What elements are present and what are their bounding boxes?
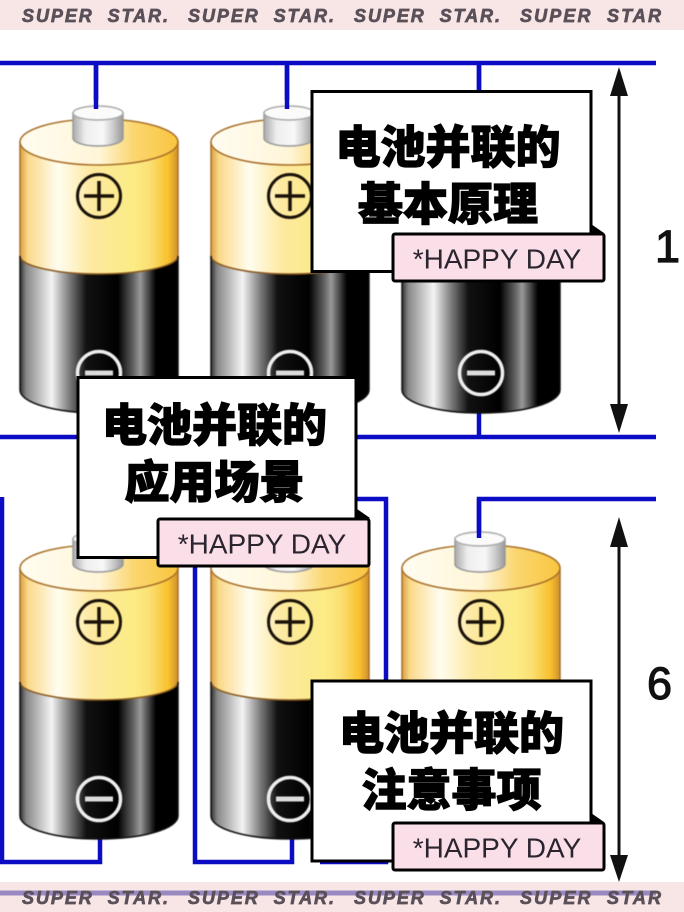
card (312, 92, 591, 272)
heading: 电池并联的 (335, 122, 561, 173)
battery bottom right (402, 532, 560, 839)
wire drops onto battery caps (96, 63, 479, 538)
top banner: SUPER STAR. (22, 6, 168, 26)
heading: 应用场景 (124, 457, 305, 508)
tag (158, 519, 369, 566)
heading: 电池并联的 (102, 400, 327, 451)
tag corner (591, 224, 604, 233)
card (78, 378, 356, 558)
bottom circuit wires (2, 497, 656, 862)
bottom banner: SUPER STAR. (354, 888, 500, 908)
heading: 注意事项 (361, 765, 542, 816)
bottom banner: SUPER STAR. (22, 888, 168, 908)
heading: 电池并联的 (339, 708, 564, 759)
tag text: *HAPPY DAY (178, 528, 347, 560)
dimension number 1: 1 (655, 221, 680, 272)
tag (393, 234, 604, 281)
panel: application scenarios (78, 378, 370, 566)
battery top left (20, 106, 178, 413)
bottom banner: SUPER STAR. (188, 888, 334, 908)
tag text: *HAPPY DAY (413, 244, 582, 274)
tag corner (357, 509, 370, 518)
battery top right (402, 106, 560, 413)
top banner (0, 0, 684, 30)
top banner: SUPER STAR. (354, 6, 500, 26)
tag (393, 823, 604, 870)
dimension number 6: 6 (647, 658, 672, 709)
tag text: *HAPPY DAY (413, 832, 582, 864)
tag corner (591, 813, 604, 822)
panel: basic principle (312, 92, 604, 281)
top banner: SUPER STAR (520, 6, 661, 26)
bottom banner: SUPER STAR (520, 888, 661, 908)
bottom banner (0, 882, 684, 912)
battery top middle (211, 106, 369, 413)
card (312, 681, 591, 861)
battery bottom middle (211, 532, 369, 839)
arrow: bottom dimension (610, 517, 628, 882)
battery bottom left (20, 532, 178, 839)
top banner: SUPER STAR. (188, 6, 334, 26)
arrow: top dimension (610, 67, 628, 433)
top circuit wires (0, 63, 656, 437)
heading: 基本原理 (358, 179, 538, 230)
panel: precautions (312, 681, 604, 870)
